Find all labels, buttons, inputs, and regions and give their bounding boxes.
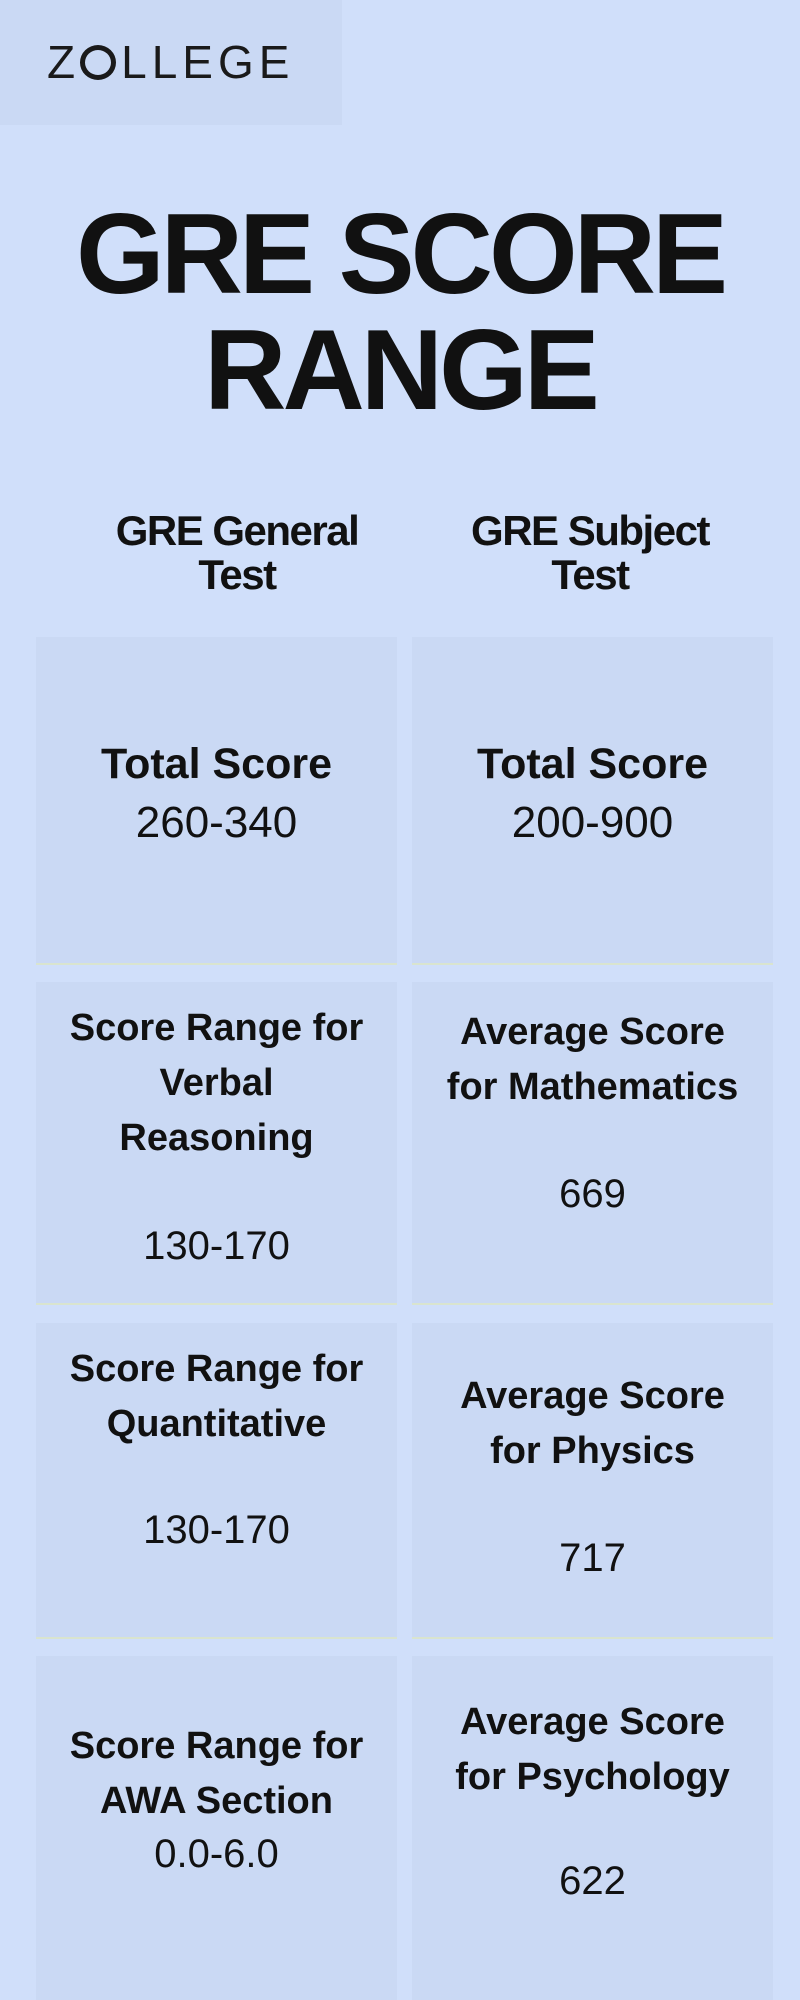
cell: verbal (36, 982, 397, 1305)
cell: psychology (412, 1656, 773, 2000)
cell: AWA: AWA Section (100, 1780, 333, 1822)
cell: subject total (412, 637, 773, 965)
title: GRE SCORE (76, 191, 724, 318)
header: subject: GRE Subject (471, 507, 709, 554)
cell: quantitative (36, 1323, 397, 1639)
cell: verbal: Reasoning (119, 1117, 314, 1159)
logo box (0, 0, 342, 125)
cell: subject total: 200-900 (512, 798, 673, 847)
cell: general total: Total Score (101, 740, 332, 788)
cell: quantitative: Quantitative (107, 1403, 326, 1445)
cell: AWA (36, 1656, 397, 2000)
cell: quantitative: Score Range for (70, 1348, 363, 1390)
cell: general total: 260-340 (136, 798, 297, 847)
cell: AWA: Score Range for (70, 1725, 363, 1767)
header: general: GRE General (116, 507, 358, 554)
header: subject (471, 507, 710, 598)
cell: AWA: 0.0-6.0 (154, 1832, 279, 1876)
cell: psychology: for Psychology (455, 1756, 730, 1798)
cell: general total (36, 637, 397, 965)
cell: quantitative: 130-170 (143, 1508, 290, 1552)
header: subject: Test (551, 551, 629, 598)
cell: verbal: 130-170 (143, 1224, 290, 1268)
cell: verbal: Verbal (159, 1062, 274, 1104)
header: general (116, 507, 358, 598)
cell: physics: 717 (559, 1536, 626, 1580)
cell: mathematics (412, 982, 773, 1305)
cell: physics: Average Score (460, 1375, 725, 1417)
cell: physics (412, 1323, 773, 1639)
cell: psychology: 622 (559, 1859, 626, 1903)
header: general: Test (198, 551, 276, 598)
cell: psychology: Average Score (460, 1701, 725, 1743)
cell: subject total: Total Score (477, 740, 708, 788)
cell: mathematics: for Mathematics (447, 1066, 738, 1108)
cell: physics: for Physics (490, 1430, 695, 1472)
cell: mathematics: Average Score (460, 1011, 725, 1053)
title (76, 191, 724, 434)
cell: mathematics: 669 (559, 1172, 626, 1216)
logo text: Z LLEGE (47, 36, 294, 88)
title: RANGE (204, 307, 596, 434)
cell: verbal: Score Range for (70, 1007, 363, 1049)
